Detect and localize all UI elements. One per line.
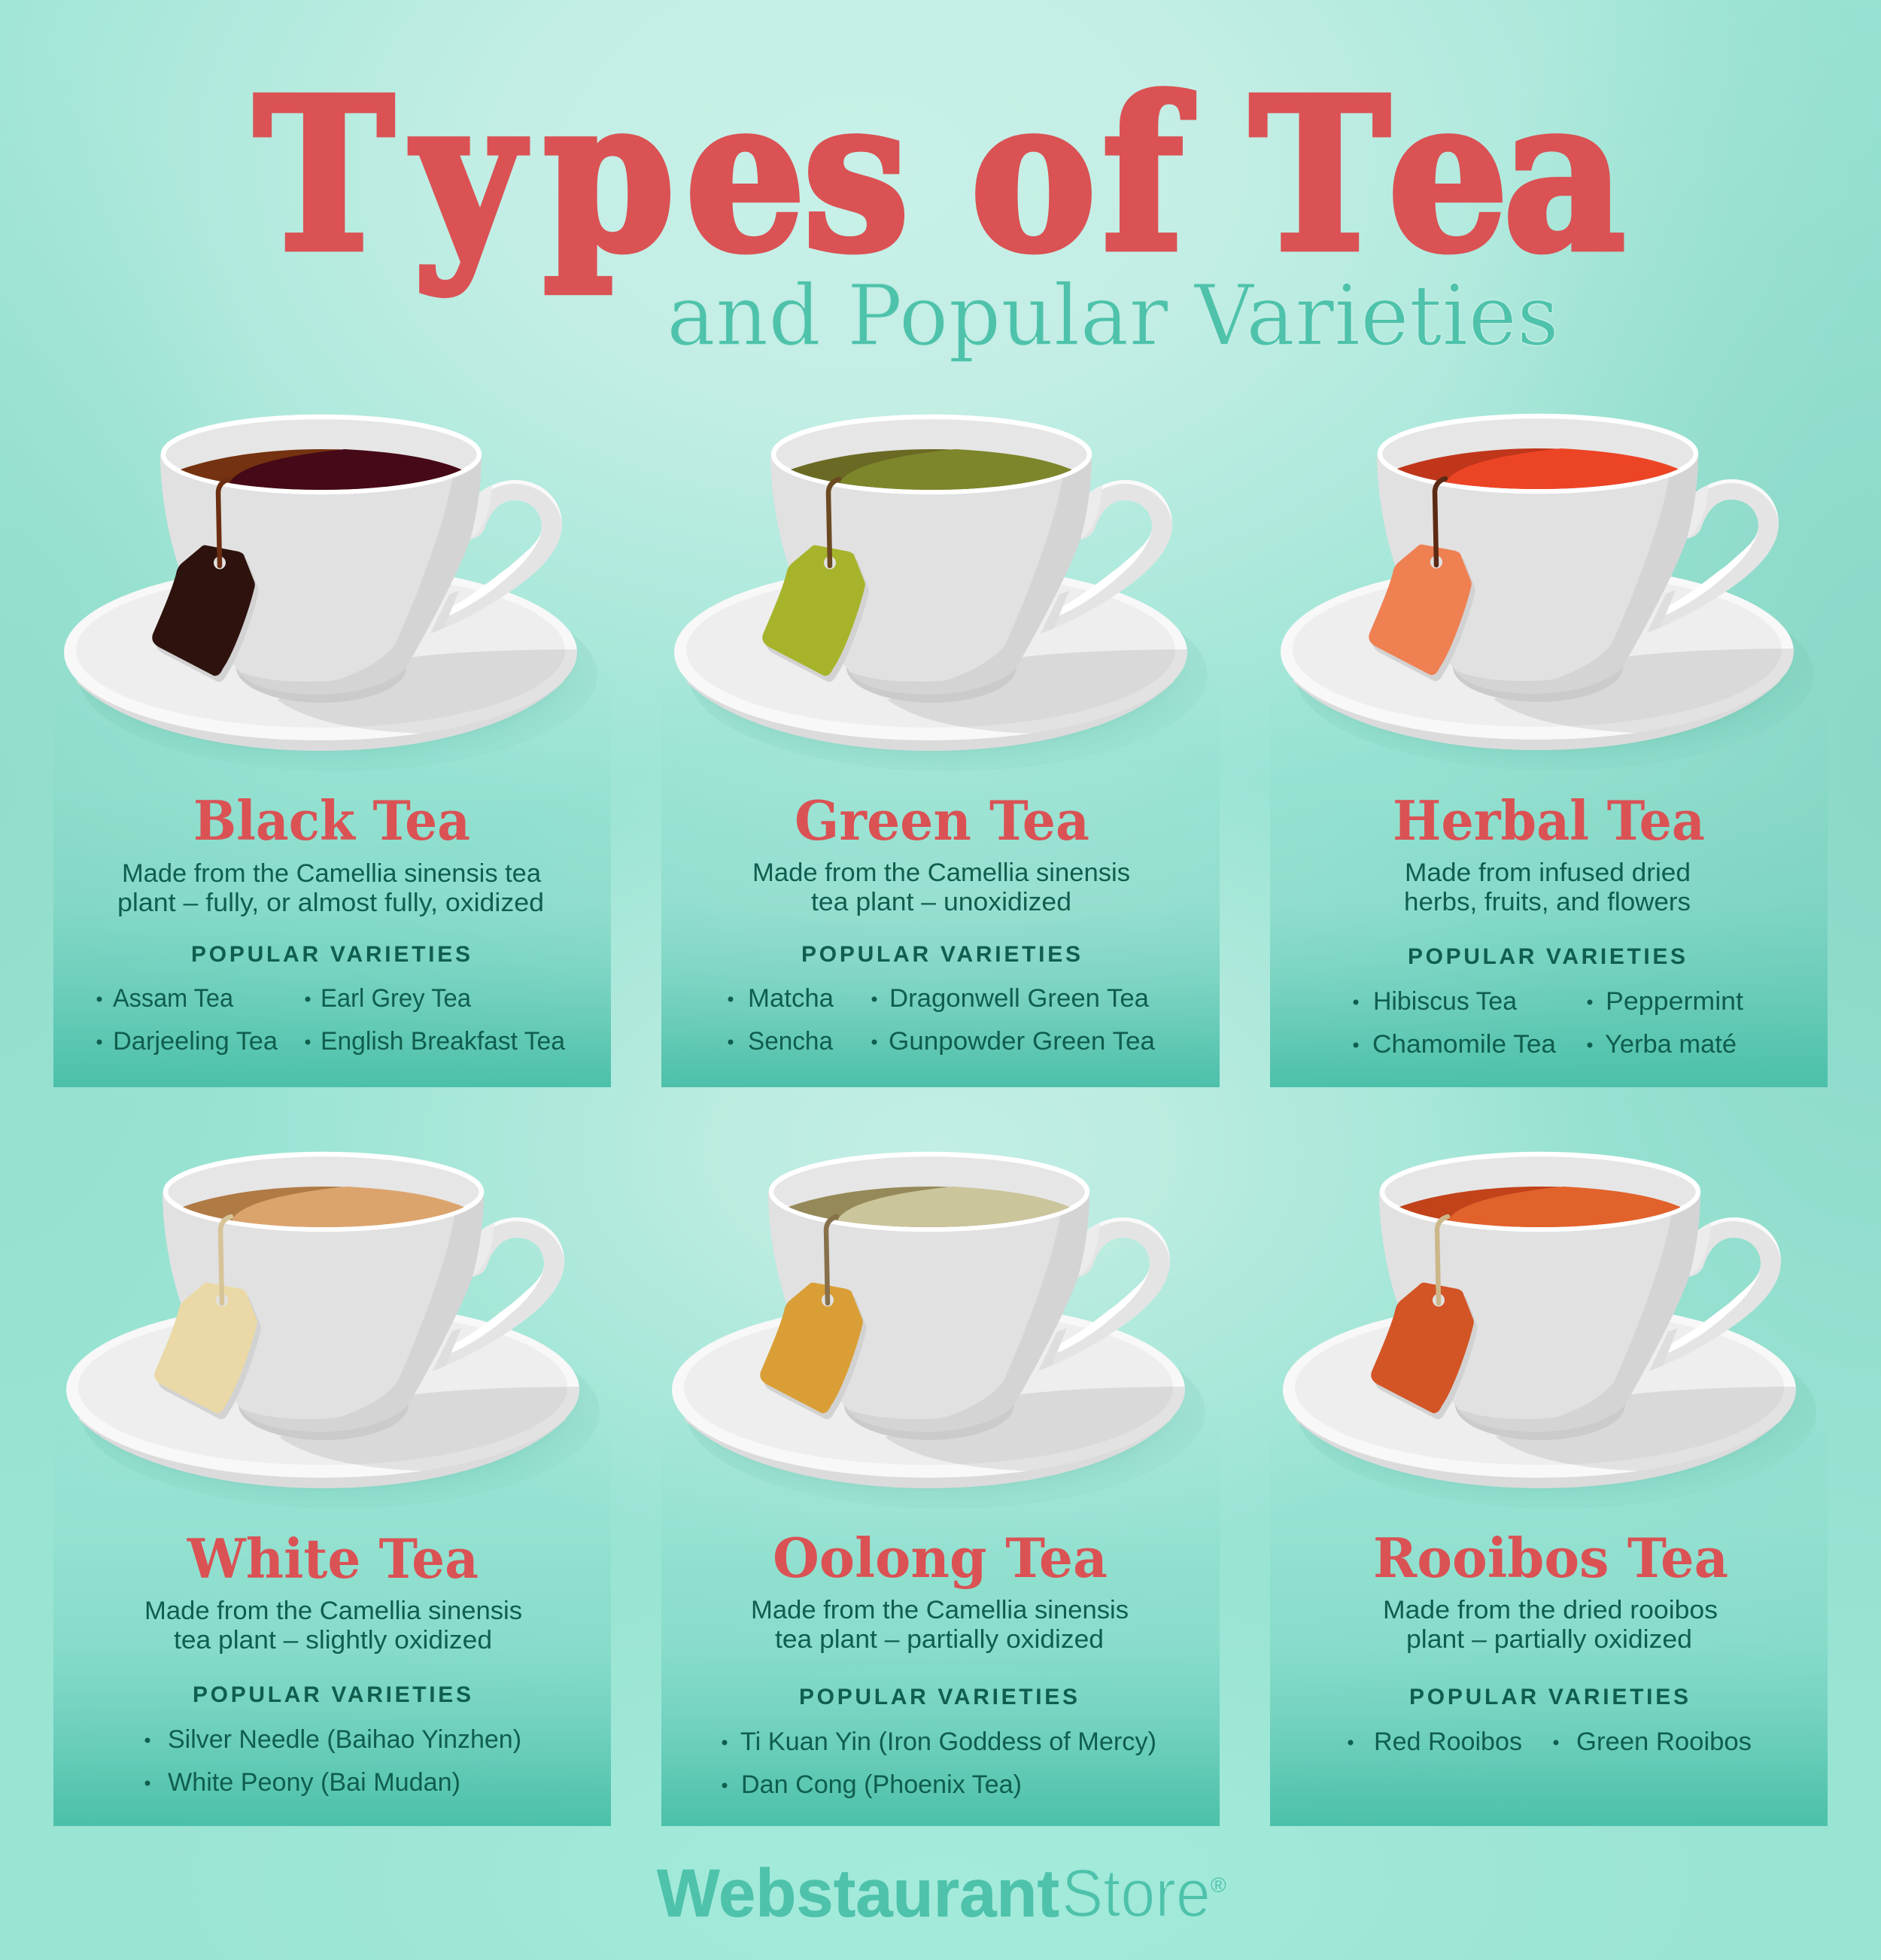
subtitle: and Popular Varieties bbox=[667, 268, 1559, 365]
icon: green tea cup bbox=[674, 417, 1208, 771]
rooibos tea string bbox=[1437, 1217, 1448, 1303]
varieties list: white tea: White Peony (Bai Mudan) bbox=[168, 1768, 460, 1797]
icon: rooibos tea cup bbox=[1283, 1154, 1816, 1509]
description: green tea: Made from the Camellia sinensis bbox=[752, 858, 1130, 887]
icon: oolong tea cup bbox=[672, 1154, 1205, 1509]
description: rooibos tea: Made from the dried rooibos bbox=[1383, 1596, 1718, 1624]
description: oolong tea: tea plant – partially oxidized bbox=[775, 1625, 1104, 1654]
black tea string bbox=[218, 479, 229, 566]
varieties list: black tea: English Breakfast Tea bbox=[321, 1027, 565, 1056]
varieties list: herbal tea: Peppermint bbox=[1606, 987, 1744, 1016]
rooibos tea liquid bbox=[1399, 1187, 1681, 1227]
label: popular varieties: POPULAR VARIETIES bbox=[799, 1685, 1077, 1709]
icon: white tea cup bbox=[66, 1154, 600, 1509]
oolong tea string bbox=[826, 1217, 837, 1303]
green tea liquid bbox=[791, 449, 1071, 490]
label: popular varieties: POPULAR VARIETIES bbox=[801, 942, 1080, 967]
heading: white tea: White Tea bbox=[187, 1527, 479, 1591]
description: green tea: tea plant – unoxidized bbox=[811, 888, 1071, 916]
icon: black tea cup bbox=[64, 417, 597, 771]
white tea string bbox=[220, 1217, 231, 1303]
herbal tea string bbox=[1435, 479, 1445, 565]
black tea tag bbox=[152, 545, 259, 682]
varieties list: green tea: Gunpowder Green Tea bbox=[889, 1027, 1155, 1056]
title: Types of Tea bbox=[254, 53, 1625, 298]
heading: black tea: Black Tea bbox=[193, 789, 470, 852]
oolong tea tag bbox=[760, 1283, 867, 1419]
varieties list: green tea: Matcha bbox=[748, 984, 834, 1013]
icon: herbal tea cup bbox=[1281, 416, 1814, 770]
panel: oolong tea bbox=[661, 1401, 1220, 1826]
varieties list: rooibos tea bbox=[1348, 1728, 1752, 1756]
varieties list: herbal tea: Yerba maté bbox=[1605, 1030, 1737, 1059]
panel: white tea bbox=[53, 1401, 611, 1826]
black tea liquid bbox=[181, 449, 462, 490]
description: white tea: Made from the Camellia sinensis bbox=[144, 1597, 522, 1625]
description: oolong tea bbox=[751, 1596, 1129, 1654]
varieties list: oolong tea bbox=[722, 1728, 1156, 1799]
white tea tag bbox=[154, 1283, 261, 1419]
white tea liquid bbox=[183, 1187, 463, 1227]
varieties list: black tea: Darjeeling Tea bbox=[113, 1027, 278, 1056]
varieties list: oolong tea: Ti Kuan Yin (Iron Goddess of Mercy) bbox=[740, 1728, 1156, 1756]
label: popular varieties: POPULAR VARIETIES bbox=[191, 942, 470, 967]
herbal tea tag bbox=[1369, 545, 1475, 681]
description: herbal tea bbox=[1404, 858, 1691, 916]
heading: herbal tea: Herbal Tea bbox=[1393, 789, 1705, 852]
varieties list: herbal tea: Chamomile Tea bbox=[1372, 1030, 1556, 1059]
varieties list: black tea bbox=[96, 984, 565, 1056]
description: black tea bbox=[117, 859, 544, 917]
description: herbal tea: Made from infused dried bbox=[1405, 858, 1691, 887]
description: black tea: Made from the Camellia sinensis tea bbox=[122, 859, 541, 888]
varieties list: green tea: Dragonwell Green Tea bbox=[889, 984, 1149, 1013]
varieties list: black tea: Earl Grey Tea bbox=[321, 984, 471, 1013]
varieties list: herbal tea bbox=[1353, 987, 1744, 1059]
varieties list: white tea: Silver Needle (Baihao Yinzhen) bbox=[168, 1725, 521, 1754]
panel: green tea bbox=[661, 662, 1220, 1087]
label: popular varieties: POPULAR VARIETIES bbox=[193, 1682, 471, 1707]
varieties list: oolong tea: Dan Cong (Phoenix Tea) bbox=[741, 1770, 1022, 1799]
description: herbal tea: herbs, fruits, and flowers bbox=[1404, 888, 1691, 916]
logo: WebstaurantStore: ® bbox=[1211, 1873, 1226, 1897]
varieties list: green tea: Sencha bbox=[748, 1027, 833, 1056]
varieties list: herbal tea: Hibiscus Tea bbox=[1373, 987, 1517, 1016]
heading: green tea: Green Tea bbox=[795, 789, 1089, 852]
description: green tea bbox=[752, 858, 1130, 916]
panel: herbal tea bbox=[1270, 662, 1828, 1087]
heading: oolong tea: Oolong Tea bbox=[773, 1526, 1108, 1590]
description: oolong tea: Made from the Camellia sinensis bbox=[751, 1596, 1129, 1624]
description: rooibos tea bbox=[1383, 1596, 1718, 1654]
herbal tea liquid bbox=[1397, 448, 1678, 489]
varieties list: black tea: Assam Tea bbox=[113, 984, 233, 1013]
description: white tea bbox=[144, 1597, 522, 1655]
panel: rooibos tea bbox=[1270, 1401, 1828, 1826]
heading: rooibos tea: Rooibos Tea bbox=[1373, 1526, 1728, 1590]
logo: WebstaurantStore: Webstaurant bbox=[657, 1856, 1059, 1931]
oolong tea liquid bbox=[789, 1187, 1070, 1227]
description: rooibos tea: plant – partially oxidized bbox=[1406, 1625, 1692, 1654]
varieties list: rooibos tea: Red Rooibos bbox=[1374, 1728, 1522, 1756]
rooibos tea tag bbox=[1371, 1283, 1478, 1419]
description: white tea: tea plant – slightly oxidized bbox=[174, 1626, 492, 1655]
logo: WebstaurantStore: Store bbox=[1062, 1856, 1211, 1931]
varieties list: rooibos tea: Green Rooibos bbox=[1576, 1728, 1752, 1756]
varieties list: white tea bbox=[144, 1725, 521, 1797]
label: popular varieties: POPULAR VARIETIES bbox=[1408, 944, 1685, 969]
description: black tea: plant – fully, or almost fully, oxidized bbox=[117, 889, 544, 917]
varieties list: green tea bbox=[728, 984, 1155, 1056]
panel: black tea bbox=[53, 662, 611, 1087]
green tea tag bbox=[762, 545, 869, 682]
green tea string bbox=[828, 479, 839, 566]
label: popular varieties: POPULAR VARIETIES bbox=[1409, 1685, 1688, 1709]
